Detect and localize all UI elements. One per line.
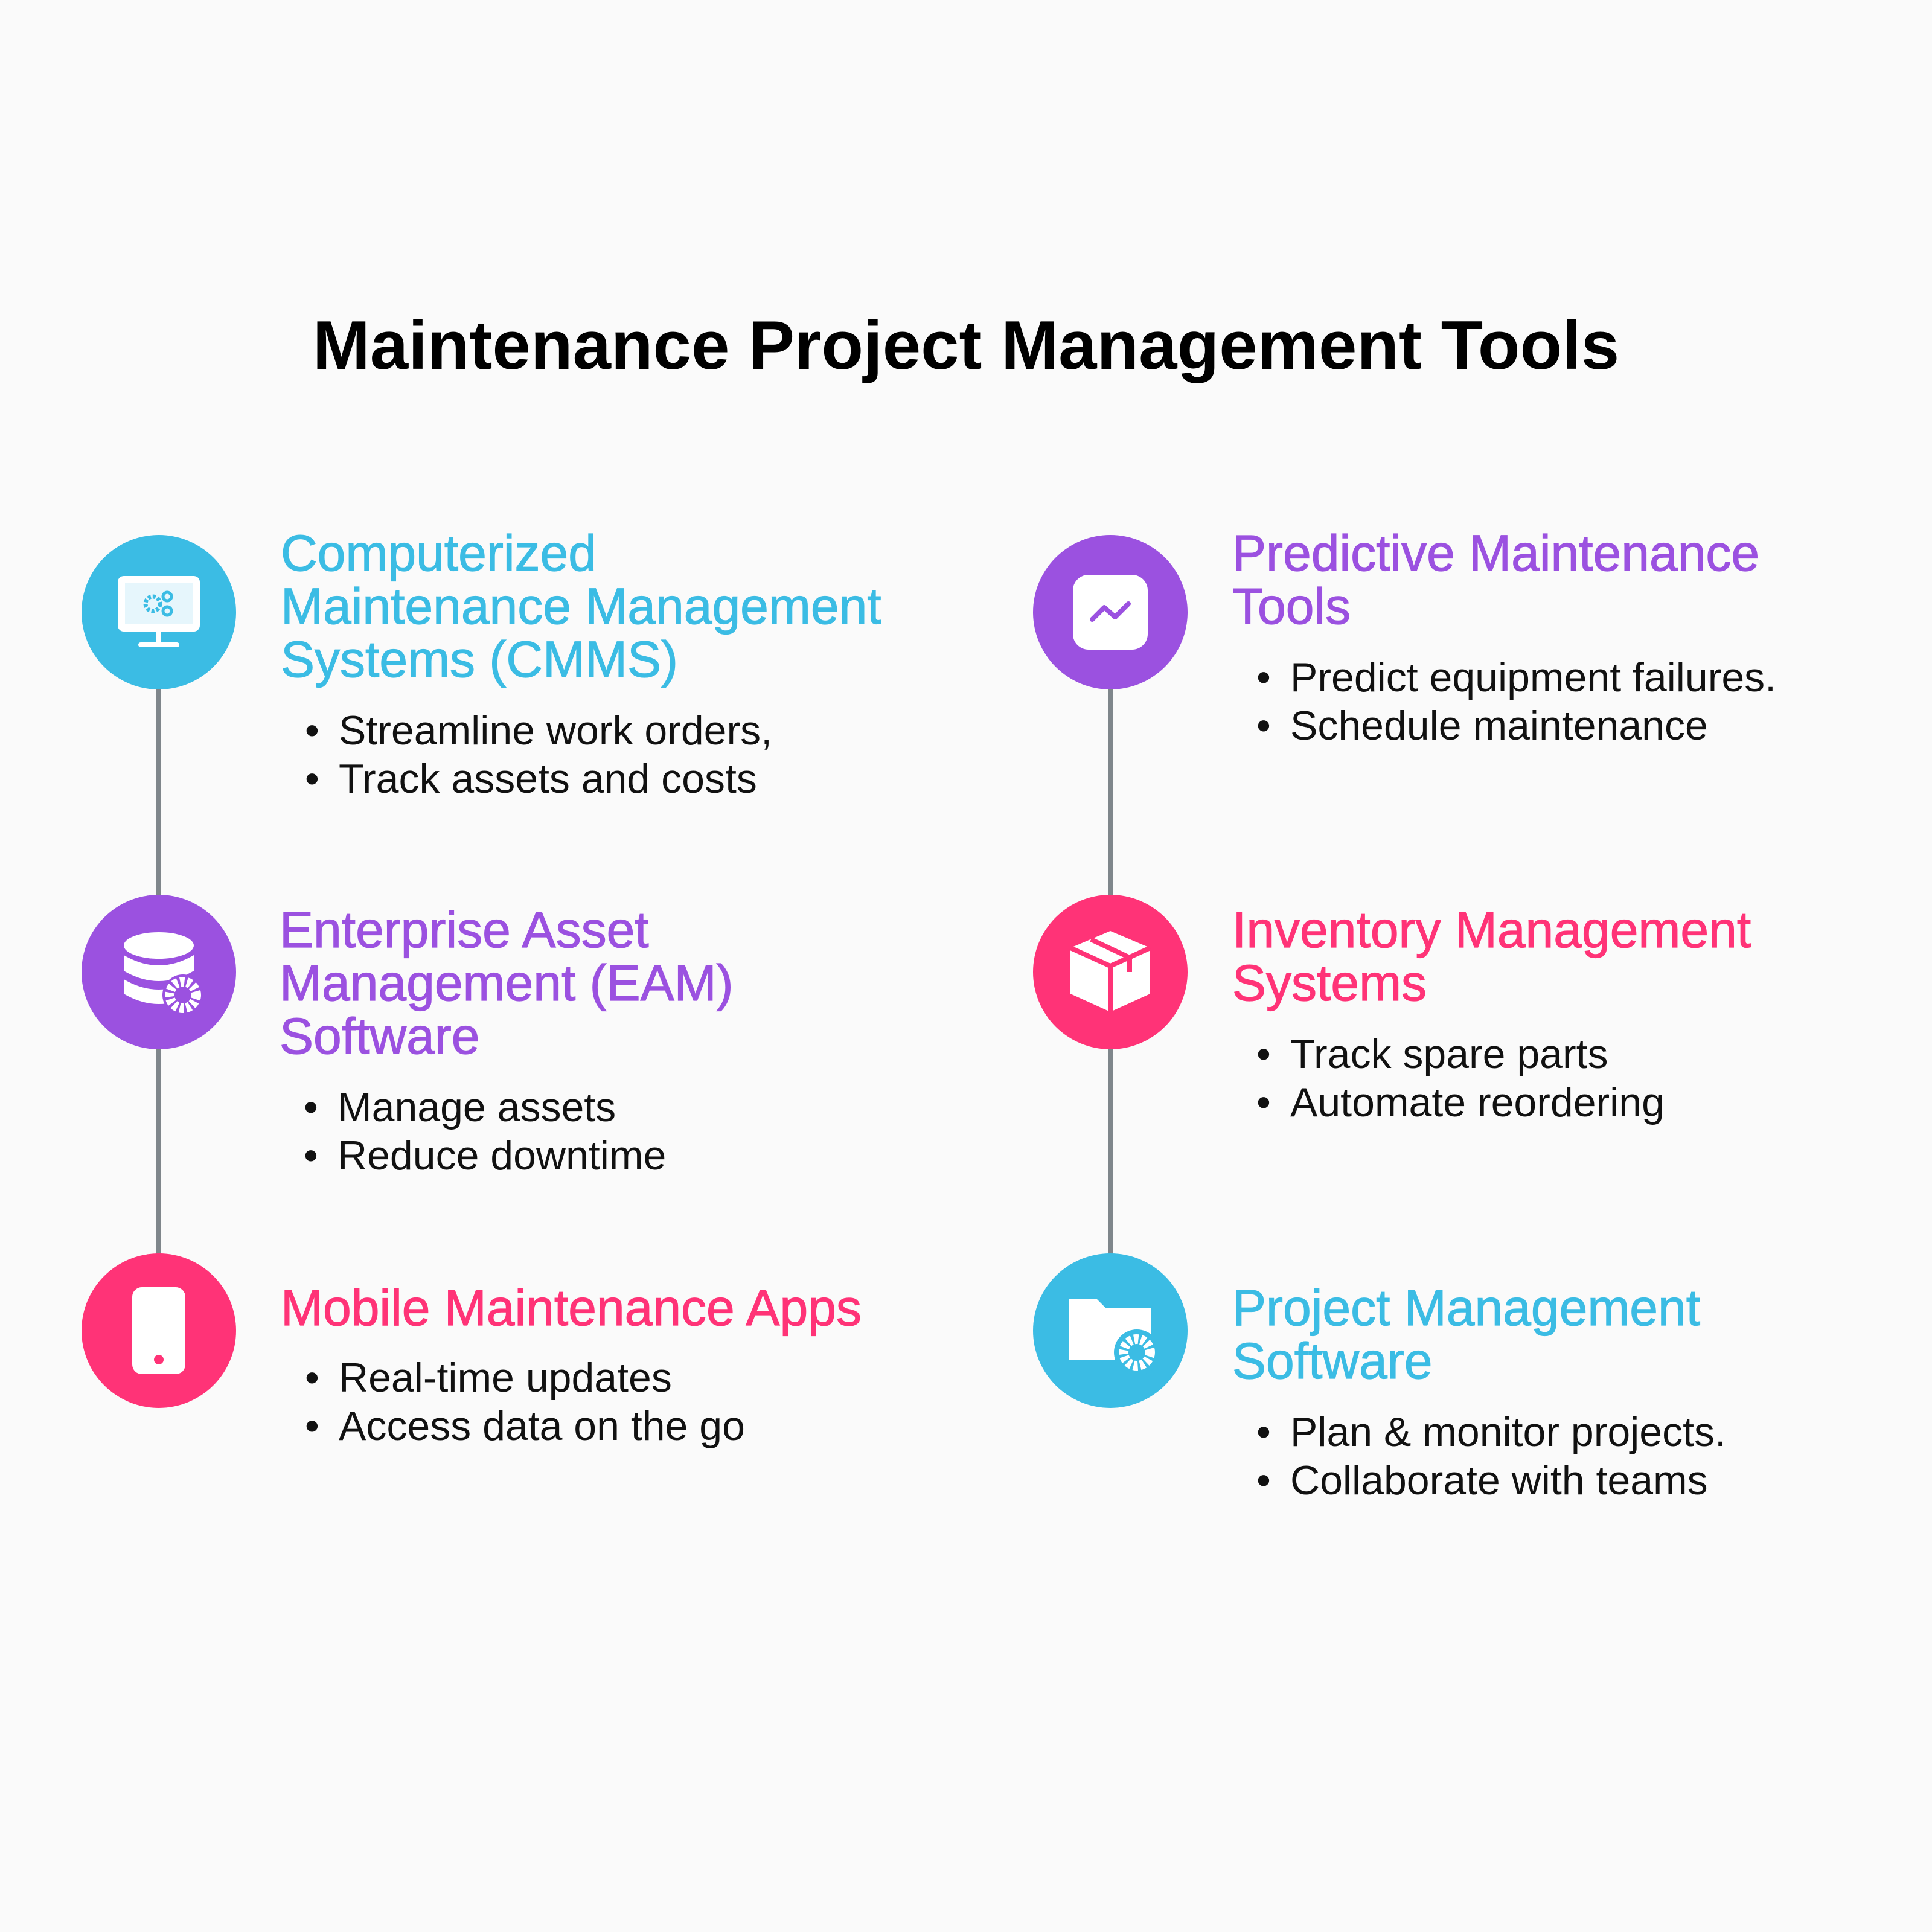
bullets: Mobile	[307, 1355, 745, 1449]
heading: EAM: Management (EAM)	[280, 955, 734, 1011]
heading: EAM	[280, 901, 734, 1064]
heading: Project Management: Software	[1232, 1332, 1432, 1389]
heading: Project Management: Project Management	[1232, 1279, 1700, 1336]
bullets: CMMS	[307, 708, 772, 802]
heading: EAM: Enterprise Asset	[280, 901, 649, 958]
bullets: Project Management: Plan & monitor projects.	[1290, 1409, 1726, 1455]
icon: predictive chart	[1033, 535, 1188, 689]
heading: Predictive	[1232, 525, 1759, 635]
heading: CMMS: Computerized	[281, 525, 597, 581]
icon: mobile phone	[82, 1253, 236, 1408]
heading: Inventory: Inventory Management	[1232, 901, 1751, 958]
bullets: CMMS: Streamline work orders,	[339, 708, 772, 753]
panel: Predictive	[1232, 525, 1776, 749]
heading: Inventory	[1232, 901, 1751, 1012]
icon: project folder	[1033, 1253, 1188, 1408]
panel: Project Management	[1232, 1279, 1726, 1503]
bullets: Inventory: Automate reordering	[1290, 1080, 1665, 1125]
heading: Inventory: Systems	[1232, 955, 1427, 1011]
bullets: CMMS: Track assets and costs	[339, 756, 757, 802]
heading: CMMS	[281, 525, 881, 688]
panel: Mobile	[281, 1279, 862, 1449]
heading: CMMS: Systems (CMMS)	[281, 631, 678, 688]
bullets: Predictive: Predict equipment failures.	[1290, 654, 1776, 700]
bullets: EAM: Reduce downtime	[337, 1133, 666, 1179]
bullets: Inventory: Track spare parts	[1290, 1031, 1608, 1077]
icon: CMMS monitor	[82, 535, 236, 689]
title: Maintenance Project Management Tools	[313, 307, 1619, 384]
bullets: Predictive: Schedule maintenance	[1290, 703, 1708, 749]
panel: EAM	[280, 901, 734, 1179]
bullets: Project Management: Collaborate with teams	[1290, 1457, 1708, 1503]
heading: CMMS: Maintenance Management	[281, 578, 881, 635]
bullets: Project Management	[1258, 1409, 1726, 1503]
heading: Mobile: Mobile Maintenance Apps	[281, 1279, 862, 1336]
bullets: Inventory	[1258, 1031, 1665, 1125]
bullets: EAM: Manage assets	[337, 1084, 616, 1130]
bullets: Mobile: Access data on the go	[339, 1403, 745, 1449]
icon: inventory box	[1033, 895, 1188, 1049]
panel: CMMS	[281, 525, 881, 802]
connector lines	[156, 688, 161, 897]
heading: Project Management	[1232, 1279, 1700, 1389]
panel: Inventory	[1232, 901, 1751, 1125]
icon: EAM database	[82, 895, 236, 1049]
heading: EAM: Software	[280, 1008, 479, 1064]
heading: Predictive: Tools	[1232, 578, 1351, 635]
bullets: EAM	[305, 1084, 666, 1179]
bullets: Predictive	[1258, 654, 1776, 749]
bullets: Mobile: Real-time updates	[339, 1355, 672, 1401]
heading: Predictive: Predictive Maintenance	[1232, 525, 1759, 581]
